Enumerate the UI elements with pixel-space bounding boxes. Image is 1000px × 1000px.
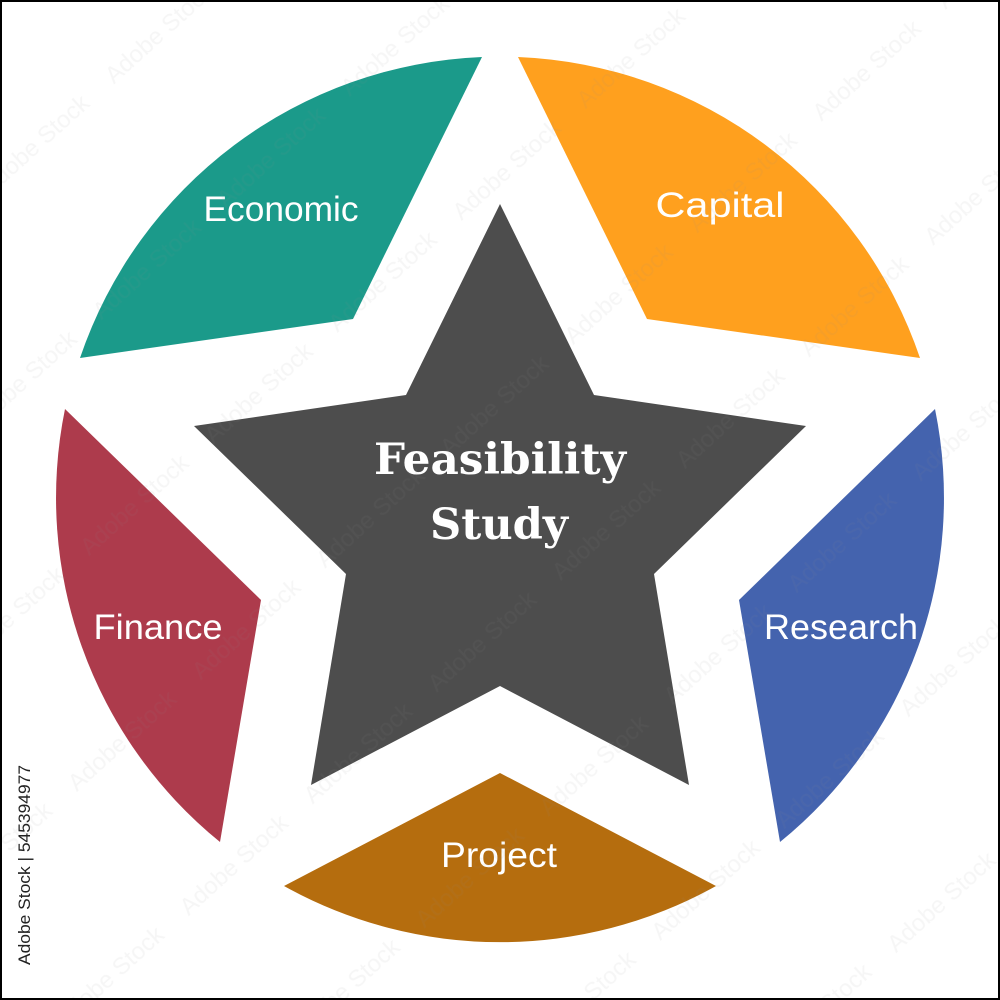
label: Project: Project	[441, 836, 557, 875]
label: Capital: Capital	[656, 186, 784, 225]
segment: Research	[739, 409, 944, 842]
label: Research: Research	[764, 608, 918, 647]
segment: Finance	[56, 409, 261, 842]
segment: Project	[284, 773, 716, 942]
stock id: Adobe Stock | 545394977	[16, 765, 34, 965]
star title: Study	[430, 500, 570, 550]
central star	[194, 204, 806, 785]
segment: Capital	[518, 57, 920, 358]
label: Economic: Economic	[204, 190, 358, 229]
label: Finance: Finance	[94, 608, 222, 647]
segment: Economic	[80, 57, 482, 358]
star title: Feasibility	[374, 435, 628, 485]
